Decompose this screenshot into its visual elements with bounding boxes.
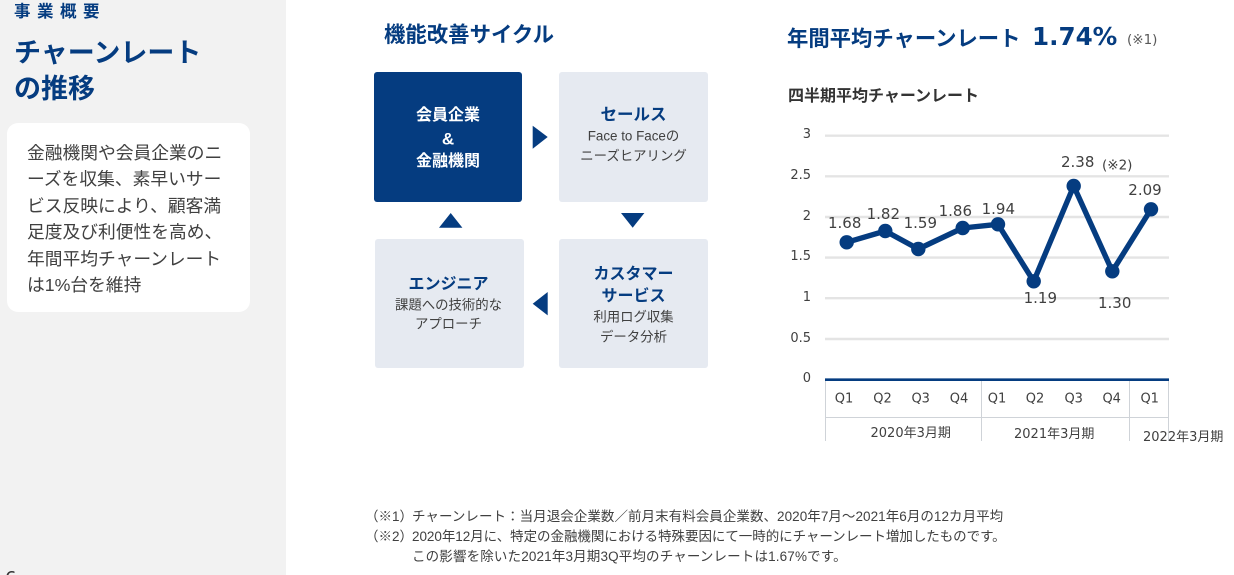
box: sales <box>559 72 708 202</box>
text card: summary <box>7 123 250 312</box>
fiscal year labels: 2022年3月期 <box>1143 430 1223 445</box>
footnote 2: （※2） <box>365 529 413 544</box>
quarter labels: Q3 <box>911 392 930 406</box>
summary text: 足度及び利便性を高め、 <box>27 222 222 242</box>
summary text: は1%台を維持 <box>27 275 141 295</box>
heading: churn rate trend: の推移 <box>14 74 95 104</box>
box text: ニーズヒアリング <box>580 148 687 163</box>
footnote 1: （※1） <box>365 509 413 524</box>
box text: アプローチ <box>415 316 482 331</box>
data line <box>847 186 1151 281</box>
arrow: up <box>439 213 462 228</box>
quarter labels: Q4 <box>950 392 968 406</box>
line chart: quarterly average churn rate <box>790 127 1223 445</box>
footnote mark: (※1) <box>1127 32 1157 48</box>
arrow: left <box>532 292 548 316</box>
y axis labels <box>790 127 811 386</box>
box text <box>395 276 502 331</box>
section label: 事業概要 <box>14 3 106 21</box>
panel: left sidebar <box>0 0 286 575</box>
box text: エンジニア <box>408 276 488 293</box>
heading: improvement cycle: 機能改善サイクル <box>384 23 554 47</box>
footnotes <box>365 509 1006 564</box>
fiscal year labels: 2020年3月期 <box>870 426 951 441</box>
footnote 1 <box>365 509 1003 524</box>
data labels: 1.30 <box>1098 294 1131 312</box>
heading label: 年間平均チャーンレート <box>787 27 1020 51</box>
summary text <box>27 143 222 295</box>
box text: 金融機関 <box>416 153 480 170</box>
box text: 会員企業 <box>416 107 480 124</box>
data points <box>840 179 1158 288</box>
quarter labels: Q1 <box>988 392 1006 406</box>
box: engineers <box>375 239 524 368</box>
footnote 2 <box>365 529 1006 544</box>
fiscal year labels: 2021年3月期 <box>1014 427 1094 442</box>
box text: 利用ログ収集 <box>593 309 674 324</box>
summary text: ビス反映により、顧客満 <box>27 196 221 216</box>
summary text: 年間平均チャーンレート <box>27 249 221 269</box>
quarter labels: Q1 <box>1140 392 1159 406</box>
y axis labels: 2 <box>803 209 811 224</box>
y axis labels: 0.5 <box>790 331 811 346</box>
data labels: 1.68 <box>828 214 861 232</box>
y axis labels: 3 <box>803 127 811 142</box>
box: customer service <box>559 239 708 368</box>
y axis labels: 0 <box>803 371 811 386</box>
arrow: down <box>621 213 644 228</box>
y axis labels: 1 <box>803 290 811 305</box>
heading: churn rate trend <box>14 38 201 104</box>
box text: カスタマー <box>593 266 674 283</box>
heading: churn rate trend: チャーンレート <box>14 38 201 68</box>
chart title: 四半期平均チャーンレート <box>788 88 979 105</box>
quarter labels <box>835 392 1159 406</box>
data labels: 1.82 <box>867 205 900 223</box>
footnotes: 2020年12月に、特定の金融機関における特殊要因にて一時的にチャーンレート増加したものです。 <box>412 529 1006 544</box>
data labels: 1.94 <box>982 200 1015 218</box>
data labels: 1.59 <box>904 214 937 232</box>
value: 1.74%: 1.74% <box>1032 22 1117 51</box>
data labels <box>828 153 1162 312</box>
data labels: 1.19 <box>1024 289 1057 307</box>
quarter labels: Q2 <box>1026 392 1044 406</box>
heading: annual average churn rate <box>787 22 1157 51</box>
panel: cycle diagram <box>374 72 708 368</box>
quarter labels: Q4 <box>1102 392 1121 406</box>
fiscal year labels <box>870 426 1223 445</box>
box text <box>593 266 674 344</box>
data labels: 2.09 <box>1128 181 1162 199</box>
y axis labels: 2.5 <box>790 168 811 183</box>
footnotes: チャーンレート：当月退会企業数／前月末有料会員企業数、2020年7月～2021年6月の12カ月平均 <box>412 509 1003 524</box>
x axis baseline <box>825 378 1169 381</box>
box text: 課題への技術的な <box>395 297 502 312</box>
quarter labels: Q1 <box>835 392 853 406</box>
quarter labels: Q3 <box>1064 392 1083 406</box>
box: member companies and financial institutions <box>374 72 522 202</box>
box text: データ分析 <box>600 329 667 344</box>
box text: Face to Faceの <box>588 128 679 143</box>
summary text: 金融機関や会員企業のニ <box>27 143 222 163</box>
arrow: right <box>532 126 548 149</box>
quarter labels: Q2 <box>873 392 892 406</box>
footnote mark on 2.38: (※2) <box>1102 158 1132 174</box>
footnote 2 continued: この影響を除いた2021年3月期3Q平均のチャーンレートは1.67%です。 <box>412 549 847 564</box>
box text: セールス <box>600 106 666 124</box>
data labels: 2.38 <box>1061 153 1094 171</box>
box text <box>416 106 480 170</box>
y axis labels: 1.5 <box>790 249 811 264</box>
summary text: ーズを収集、素早いサー <box>27 169 221 189</box>
data labels: 1.86 <box>939 202 972 220</box>
box text: サービス <box>601 288 666 305</box>
box text <box>580 106 687 163</box>
box text: & <box>442 130 454 148</box>
